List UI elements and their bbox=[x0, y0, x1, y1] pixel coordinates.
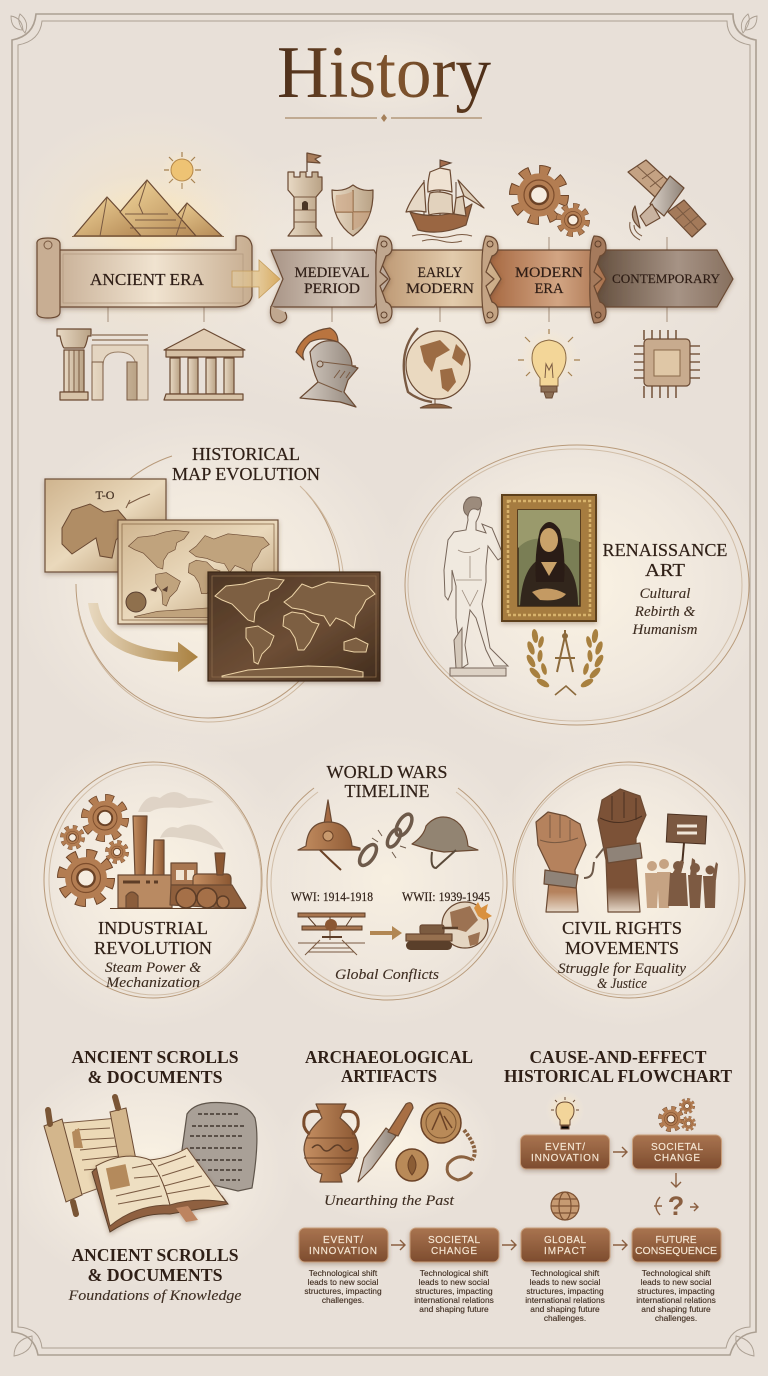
description: societal change: structures, impacting bbox=[415, 1286, 493, 1296]
arrow bbox=[613, 1147, 627, 1157]
flow row: four stages bbox=[299, 1228, 721, 1262]
description: future consequence: leads to new social bbox=[641, 1277, 712, 1287]
description: global impact bbox=[525, 1268, 605, 1323]
icon: column and arches bbox=[57, 329, 148, 400]
icon: question mark with arrows bbox=[654, 1191, 698, 1221]
icon: light bulb bbox=[518, 328, 580, 398]
icon: open book bbox=[92, 1148, 228, 1232]
text block: RENAISSANCE bbox=[602, 540, 728, 560]
band: medieval period: PERIOD bbox=[304, 281, 360, 297]
description: societal change: Technological shift bbox=[420, 1268, 489, 1278]
icon: stone tablet bbox=[182, 1102, 257, 1191]
text block: MOVEMENTS bbox=[565, 938, 679, 958]
statue of David bbox=[444, 497, 508, 676]
text block: & Justice bbox=[597, 976, 647, 992]
heading: CAUSE-AND-EFFECT bbox=[530, 1047, 706, 1067]
decorative ring bbox=[76, 456, 344, 722]
caption: Unearthing the Past bbox=[324, 1193, 455, 1209]
flow node: societal change: SOCIETAL bbox=[428, 1235, 480, 1246]
heading: TIMELINE bbox=[344, 781, 430, 801]
repeated heading: & DOCUMENTS bbox=[88, 1265, 222, 1285]
icon: gears bbox=[660, 1099, 695, 1130]
icon: laurel wreath and compass bbox=[525, 629, 605, 695]
icon: light bulb bbox=[545, 1090, 585, 1130]
heading: HISTORICAL FLOWCHART bbox=[504, 1066, 732, 1086]
icon: raised fist right bbox=[598, 789, 646, 912]
icon: papyrus scroll bbox=[44, 1097, 136, 1214]
band: modern era: MODERN bbox=[515, 265, 583, 281]
description: event bbox=[304, 1268, 382, 1305]
decorative ring bbox=[405, 445, 749, 725]
description: global impact: structures, impacting bbox=[526, 1286, 604, 1296]
text block: Cultural bbox=[640, 586, 690, 602]
icon: broken chain bbox=[356, 812, 415, 868]
icon: knight helmet bbox=[296, 328, 358, 407]
text block: Rebirth & bbox=[634, 604, 696, 620]
heading: MAP EVOLUTION bbox=[172, 464, 320, 484]
description: event: leads to new social bbox=[308, 1277, 379, 1287]
band: contemporary bbox=[596, 250, 733, 307]
icon: steel helmet bbox=[412, 817, 478, 868]
icon: question mark with arrows: ? bbox=[668, 1191, 684, 1221]
panel: world wars timeline bbox=[267, 762, 507, 1000]
heading bbox=[305, 1047, 473, 1086]
band: medieval period: MEDIEVAL bbox=[294, 265, 370, 281]
flow node: event / innovation: EVENT/ bbox=[323, 1235, 363, 1246]
description: global impact: international relations bbox=[525, 1295, 605, 1305]
description: societal change bbox=[414, 1268, 494, 1314]
heading bbox=[504, 1047, 732, 1086]
panel: civil rights movements bbox=[513, 762, 745, 998]
band: modern era bbox=[486, 236, 606, 323]
map: T-O medieval map: T-O bbox=[96, 488, 115, 502]
icon: pyramids bbox=[65, 175, 235, 255]
icon: raised fist left bbox=[536, 812, 586, 912]
icon: castle tower bbox=[288, 153, 322, 236]
panel: renaissance art bbox=[405, 445, 749, 725]
description: future consequence bbox=[636, 1268, 716, 1323]
flow node: societal change top: SOCIETAL bbox=[651, 1142, 703, 1153]
heading: ANCIENT SCROLLS bbox=[72, 1047, 238, 1067]
icon: spearhead tool bbox=[358, 1103, 413, 1182]
icon: chain bbox=[447, 1130, 475, 1180]
flow node: future consequence bbox=[632, 1228, 721, 1262]
icon: globe bbox=[551, 1192, 579, 1220]
painting: Mona Lisa bbox=[502, 495, 596, 621]
icon: gears bbox=[514, 170, 587, 234]
heading bbox=[72, 1047, 238, 1087]
flow node: global impact bbox=[521, 1228, 610, 1262]
dates bbox=[291, 889, 490, 904]
icon: amphora bbox=[304, 1104, 358, 1182]
flow node: societal change top bbox=[632, 1135, 722, 1169]
icon: smoke bbox=[138, 792, 224, 850]
heading: & DOCUMENTS bbox=[88, 1067, 222, 1087]
flow node: event / innovation top bbox=[520, 1135, 610, 1169]
icon: microchip bbox=[634, 330, 700, 398]
repeated heading bbox=[72, 1245, 238, 1285]
panel: industrial revolution bbox=[44, 762, 262, 998]
band: contemporary: CONTEMPORARY bbox=[612, 271, 721, 286]
icon: tank and globe bbox=[406, 902, 492, 950]
caption: Foundations of Knowledge bbox=[67, 1288, 242, 1304]
description: future consequence: Technological shift bbox=[642, 1268, 711, 1278]
flow node: global impact: IMPACT bbox=[544, 1246, 586, 1257]
heading: ARCHAEOLOGICAL bbox=[305, 1047, 473, 1067]
flow node: global impact: GLOBAL bbox=[544, 1235, 586, 1246]
icon: protesters bbox=[645, 858, 718, 908]
text block: Humanism bbox=[631, 622, 698, 638]
map: modern world map bbox=[208, 572, 380, 681]
description: societal change: leads to new social bbox=[419, 1277, 490, 1287]
panel: ancient scrolls and documents bbox=[44, 1047, 257, 1304]
icon: broken chain bbox=[584, 848, 604, 878]
map: T-O medieval map bbox=[45, 479, 166, 572]
arrow: map progression bbox=[88, 603, 198, 672]
heading: ARTIFACTS bbox=[341, 1066, 437, 1086]
description: event: challenges. bbox=[322, 1295, 364, 1305]
decorative ring bbox=[44, 762, 262, 998]
flow node: societal change top: CHANGE bbox=[654, 1153, 700, 1164]
band: early modern bbox=[380, 236, 501, 323]
panel: era timeline bbox=[37, 150, 733, 408]
banner: ancient era scroll: ANCIENT ERA bbox=[90, 270, 205, 289]
description: global impact: leads to new social bbox=[530, 1277, 601, 1287]
flow node: future consequence: FUTURE bbox=[656, 1235, 697, 1246]
dates: WWII: 1939-1945 bbox=[402, 889, 490, 904]
panel: archaeological artifacts bbox=[304, 1047, 475, 1209]
arrow bbox=[502, 1240, 516, 1250]
arrow down bbox=[671, 1173, 681, 1187]
description: global impact: Technological shift bbox=[531, 1268, 600, 1278]
description: future consequence: challenges. bbox=[655, 1313, 697, 1323]
arrow: ancient to medieval bbox=[232, 260, 280, 298]
text block bbox=[558, 918, 686, 992]
arrow: WWI to WWII bbox=[370, 926, 402, 940]
icon: sun bbox=[162, 150, 202, 190]
text block: Steam Power & bbox=[105, 960, 201, 976]
description: societal change: and shaping future bbox=[419, 1304, 489, 1314]
description: global impact: challenges. bbox=[544, 1313, 586, 1323]
text block: Struggle for Equality bbox=[558, 961, 686, 977]
heading: HISTORICAL bbox=[192, 444, 300, 464]
text block: ART bbox=[645, 560, 685, 580]
description: future consequence: and shaping future bbox=[641, 1304, 711, 1314]
icon: greek temple bbox=[164, 329, 245, 400]
arrow bbox=[391, 1240, 405, 1250]
icon: globe bbox=[404, 328, 470, 408]
flow node: societal change: CHANGE bbox=[431, 1246, 477, 1257]
repeated heading: ANCIENT SCROLLS bbox=[72, 1245, 238, 1265]
heading: WORLD WARS bbox=[326, 762, 448, 782]
decorative ring bbox=[267, 788, 507, 1000]
icon: satellite bbox=[628, 160, 706, 240]
icon: factory bbox=[118, 816, 172, 908]
icon: shield bbox=[332, 185, 373, 236]
description: global impact: and shaping future bbox=[530, 1304, 600, 1314]
banner: ancient era scroll bbox=[37, 236, 252, 318]
description: future consequence: international relations bbox=[636, 1295, 716, 1305]
flow node: event / innovation: INNOVATION bbox=[309, 1246, 377, 1257]
title: History bbox=[277, 32, 491, 114]
flow node: event / innovation bbox=[299, 1228, 388, 1262]
text block: REVOLUTION bbox=[94, 938, 212, 958]
arrow bbox=[613, 1240, 627, 1250]
text block: Mechanization bbox=[105, 975, 200, 991]
dates: WWI: 1914-1918 bbox=[291, 889, 373, 904]
icon: coins bbox=[396, 1103, 461, 1181]
decorative ring bbox=[513, 762, 745, 998]
caption: Global Conflicts bbox=[335, 967, 439, 983]
description: event: structures, impacting bbox=[304, 1286, 382, 1296]
band: early modern: MODERN bbox=[406, 281, 474, 297]
icon: gears bbox=[62, 798, 127, 902]
icon: equality protest sign bbox=[666, 814, 707, 866]
flow node: event / innovation top: EVENT/ bbox=[545, 1142, 585, 1153]
text block bbox=[94, 918, 212, 991]
title divider bbox=[285, 114, 482, 122]
connector lines bbox=[108, 237, 667, 322]
heading bbox=[172, 444, 320, 484]
flow node: future consequence: CONSEQUENCE bbox=[635, 1246, 717, 1257]
icon: pickelhaube helmet bbox=[298, 800, 360, 870]
flow node: event / innovation top: INNOVATION bbox=[531, 1153, 599, 1164]
band: medieval period bbox=[270, 236, 392, 323]
panel: cause-and-effect flowchart bbox=[299, 1047, 732, 1323]
text block: INDUSTRIAL bbox=[98, 918, 208, 938]
description: societal change: international relations bbox=[414, 1295, 494, 1305]
heading bbox=[326, 762, 448, 801]
map: age of exploration map bbox=[118, 520, 278, 624]
flow node: societal change bbox=[410, 1228, 499, 1262]
description: future consequence: structures, impacting bbox=[637, 1286, 715, 1296]
text block: CIVIL RIGHTS bbox=[562, 918, 682, 938]
icon: sailing ship bbox=[406, 160, 484, 242]
band: modern era: ERA bbox=[534, 281, 564, 297]
icon: biplane over tracks bbox=[298, 913, 365, 955]
description: event: Technological shift bbox=[309, 1268, 378, 1278]
panel: historical map evolution bbox=[45, 444, 380, 722]
icon: locomotive bbox=[110, 853, 246, 908]
band: early modern: EARLY bbox=[418, 265, 463, 281]
text block bbox=[602, 540, 728, 638]
